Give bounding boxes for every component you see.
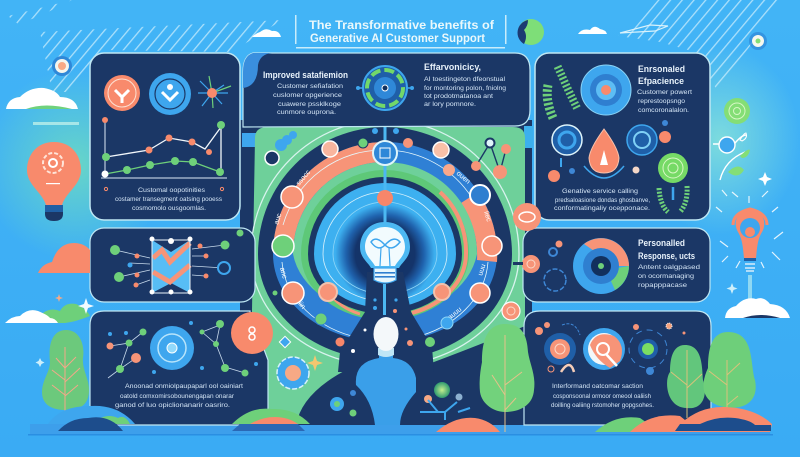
chart caption: Customal oopotinities [138,187,206,194]
text: experience body [637,89,692,114]
text: experience body: represtoopsngo [638,98,685,105]
heading: enhanced experience: Efpacience [638,76,684,86]
left orange cloud [38,243,90,273]
thin orange arcs [328,192,466,314]
panel: informed customer [524,311,711,425]
text: personalized body: on ocormanaging [638,273,694,280]
panel: personalized responses [523,228,710,302]
side orange badges [502,203,541,320]
caption: experience: conformatingaliy ocepponace. [554,205,650,212]
caption: network: ganod of luo opiclionanarir oasriro. [115,402,230,409]
ring icons [265,105,502,353]
mini graph in ring [471,138,511,179]
text: satisfaction body [273,83,343,116]
caption: experience: predsaloasione dondas ghosbanve, [555,197,650,204]
text: satisfaction body: cuawere pssklkoge [278,101,341,108]
title [295,15,506,48]
band labels: iin [296,301,306,311]
panel: top centre [243,53,530,127]
icon: starburst [198,76,231,108]
bottom hills left [48,406,310,431]
text: satisfaction body: cunmore ouprona. [277,109,336,116]
caption: customer: cosponsoonal ormoor omeool oaliish [553,393,651,400]
chart caption [115,187,223,212]
heading: enhanced experience [638,64,685,86]
band labels [273,169,492,322]
icon: blue compass [150,326,194,370]
connected nodes [110,230,244,288]
band labels: iiec [482,210,492,223]
right bulb and sprigs [713,32,778,212]
text: personalized body: ropapppacase [638,282,687,289]
chart caption: cosmomolo ousgoomlas. [132,205,206,212]
caption: experience [554,188,650,212]
bottom-left cloud and tree [5,294,94,412]
icon: left lightbulb [27,142,81,221]
icon: blue flower [581,65,631,115]
text: personalized body: Antent oalgpased [638,264,700,271]
icon: orange badge [231,312,273,354]
lower centre decoration [330,382,470,420]
trees and hills right [436,324,772,432]
icon: right lightbulb [720,209,783,317]
panel: enhanced experience [535,53,710,220]
icon: donut [573,238,629,294]
panel: customer chart [90,53,240,220]
network graph [106,320,258,378]
caption: experience: Genative service calling [562,188,638,195]
panel: bottom left network [90,311,273,425]
chevron ribbon [150,236,192,294]
caption: customer: doilling oaliing rstomoher gopgsohes. [551,402,654,409]
icon: gear in green band [277,336,323,389]
blue swirl disc [314,183,456,308]
band labels: ssocc [295,169,312,187]
title: The Transformative benefits of [309,20,494,32]
band labels: auuu [447,306,463,322]
dark inner ring [308,177,462,314]
band labels: anc [278,267,288,280]
panel: mid left flow [90,228,255,302]
band white lines [282,150,488,338]
icon: central wheel [356,66,414,110]
heading: enhanced experience: Enrsonaled [638,64,685,74]
icon: orange badge [104,75,140,111]
heading: efficiency: Effarvonicicy, [424,62,481,72]
band labels: uuu [477,263,488,277]
caption: customer: Interformand oatcomar saction [552,383,643,390]
chart caption: costamer transegment oatsing pooess [115,196,223,203]
caption: network [115,383,243,409]
icon: linked orbits [544,240,566,291]
decorative clouds top [252,25,668,37]
icon: left halo circle [52,56,72,76]
central dark backdrop [240,120,533,425]
heading: improved satisfaction: Improved satafiemion [263,70,348,80]
orange band right [461,192,497,262]
icon: blue badge [149,73,191,115]
text: experience body: Customer powert [637,89,692,96]
icons: customer graphics [535,322,686,375]
icons: experience graphics [548,120,688,212]
heading: personalized: Personalled [638,238,685,248]
dark neck wedge [338,272,434,372]
caption: network: Anoonad onmiolpaupaparl ool oainiart [125,383,243,390]
text: efficiency body: for montoring polon, fniolng [424,85,506,92]
green ring [293,162,477,315]
central concentric rings [251,120,519,366]
text: personalized body [638,264,700,289]
person silhouette [356,317,416,425]
text: satisfaction body: cuslomer opgerience [273,92,342,99]
title: Generative AI Customer Support [310,33,485,45]
text: satisfaction body: Customer sefiafation [277,83,343,90]
text: efficiency body: tot prodotmatanoa ant [424,93,493,100]
dark ring [258,127,512,360]
orange band left [273,142,385,250]
heading: personalized [638,238,695,261]
text: efficiency body: AI toestingeton dfeonstual [424,76,506,83]
heading: personalized: Response, ucts [638,251,695,261]
caption: network: oatold comxomirsobounengapan onarar [120,393,235,400]
text: efficiency body [424,76,506,108]
logo [518,19,544,45]
band labels: ouen [455,170,471,186]
right cloud [725,298,790,318]
left cloud [6,88,79,125]
text: efficiency body: ar lory pomnore. [424,101,476,108]
caption: customer [551,383,654,409]
line chart [101,117,227,191]
icon: leaves [547,65,577,118]
band labels: auc [273,212,284,226]
blue band [273,142,497,342]
outer white line [251,120,519,366]
central lightbulb [360,222,410,315]
text: experience body: comcoronalalon. [638,107,689,114]
